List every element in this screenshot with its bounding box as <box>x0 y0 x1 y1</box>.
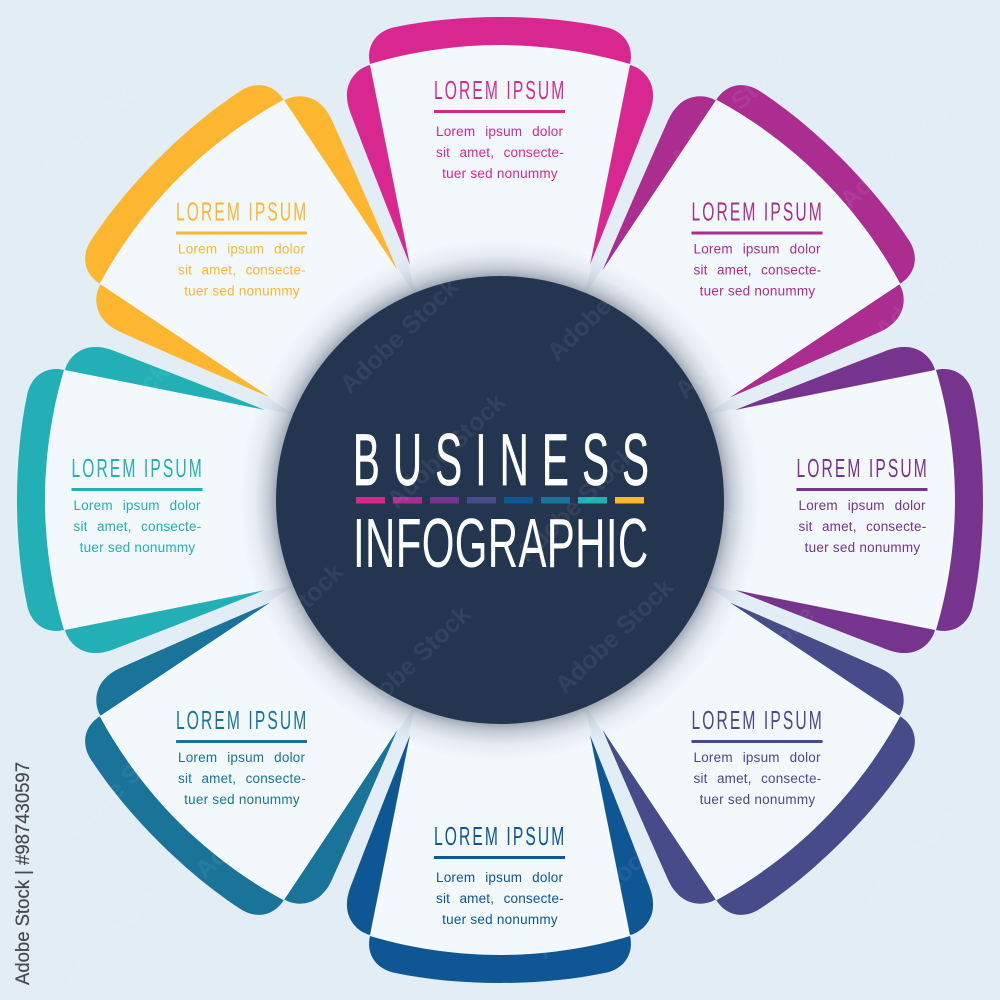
panel: indigo bottom right: tuer sed nonummy <box>700 792 815 807</box>
panel: purple right: Lorem ipsum dolor <box>798 498 926 513</box>
stock watermarks: Adobe Stock <box>720 738 849 864</box>
panel: magenta top right: Lorem ipsum dolor <box>694 242 821 256</box>
panel: yellow top left: sit amet, consecte- <box>178 262 306 278</box>
stock watermarks: Adobe Stock <box>45 358 174 484</box>
panel: pink top: Lorem ipsum dolor <box>436 124 564 139</box>
stock watermarks: Adobe Stock <box>382 388 511 514</box>
panel: pink top: tuer sed nonummy <box>442 166 558 181</box>
panel: pink top: LOREM IPSUM <box>434 76 564 105</box>
panel: pink top: sit amet, consecte- <box>436 145 564 160</box>
stock id label: Adobe Stock | #987430597 <box>13 762 34 985</box>
stock watermarks: Adobe Stock <box>670 278 799 404</box>
stock watermarks: Adobe Stock <box>190 758 319 884</box>
panel: blue bottom: Lorem ipsum dolor <box>436 870 564 885</box>
stock watermarks: Adobe Stock <box>530 838 659 964</box>
stock watermarks: Adobe Stock <box>512 441 641 567</box>
panel: blue bottom: LOREM IPSUM <box>434 822 564 851</box>
stock watermarks: Adobe Stock <box>715 408 844 534</box>
stock watermarks: Adobe Stock <box>745 548 874 674</box>
stock watermarks: Adobe Stock <box>55 863 184 989</box>
stock watermarks: Adobe Stock <box>55 723 184 849</box>
centre circle <box>276 276 724 724</box>
panel: blue bottom <box>347 600 653 983</box>
panel: purple right: tuer sed nonummy <box>805 540 920 555</box>
panel: teal blue bottom left: LOREM IPSUM <box>176 706 306 735</box>
panel: indigo bottom right: Lorem ipsum dolor <box>694 750 821 765</box>
panel: magenta top right: sit amet, consecte- <box>694 262 821 278</box>
panel: teal blue bottom left <box>50 462 538 950</box>
panel: purple right: LOREM IPSUM <box>796 454 927 483</box>
panel: yellow top left: tuer sed nonummy <box>184 284 300 298</box>
centre circle shadow <box>238 238 762 762</box>
stock watermarks: Adobe Stock <box>550 573 679 699</box>
stock watermarks: Adobe Stock <box>35 58 164 184</box>
panel: indigo bottom right <box>462 462 950 950</box>
panel: teal left: tuer sed nonummy <box>80 540 195 555</box>
panel: magenta top right <box>462 50 950 538</box>
stock watermarks: Adobe Stock <box>347 600 476 726</box>
panel: indigo bottom right: LOREM IPSUM <box>692 706 822 735</box>
panel: magenta top right: LOREM IPSUM <box>692 197 822 227</box>
panel: teal blue bottom left: sit amet, consecte- <box>178 771 306 786</box>
panel: blue bottom: tuer sed nonummy <box>442 912 558 927</box>
panel: yellow top left: Lorem ipsum dolor <box>178 242 306 256</box>
stock watermarks: Adobe Stock <box>870 218 999 344</box>
stock watermarks: Adobe Stock <box>220 558 349 684</box>
panel: teal left: LOREM IPSUM <box>72 454 202 483</box>
panel: yellow top left <box>50 50 538 538</box>
panel: indigo bottom right: sit amet, consecte- <box>694 771 821 786</box>
panel: magenta top right: tuer sed nonummy <box>700 284 815 298</box>
panel: teal left: sit amet, consecte- <box>74 519 201 534</box>
panel: yellow top left: LOREM IPSUM <box>176 197 306 227</box>
stock watermarks: Adobe Stock <box>835 88 964 214</box>
stock watermarks: Adobe Stock <box>390 733 519 859</box>
panel: pink top <box>347 17 653 400</box>
panel: teal left <box>17 347 400 653</box>
panel: purple right <box>600 347 983 653</box>
stock watermarks: Adobe Stock <box>185 233 314 359</box>
stock watermarks: Adobe Stock <box>542 240 671 366</box>
title: infographic: INFOGRAPHIC <box>353 505 648 583</box>
stock watermarks: Adobe Stock <box>335 273 464 399</box>
colour bar legend <box>356 497 644 504</box>
panel: teal left: Lorem ipsum dolor <box>74 498 201 513</box>
stock watermarks: Adobe Stock <box>665 48 794 174</box>
panel: teal blue bottom left: tuer sed nonummy <box>184 792 300 807</box>
panel: blue bottom: sit amet, consecte- <box>436 891 564 906</box>
panel: purple right: sit amet, consecte- <box>798 519 926 534</box>
stock watermarks: Adobe Stock <box>495 108 624 234</box>
stock watermarks: Adobe Stock <box>855 783 984 909</box>
title: business: BUSINESS <box>353 421 649 501</box>
panel: teal blue bottom left: Lorem ipsum dolor <box>178 750 306 765</box>
